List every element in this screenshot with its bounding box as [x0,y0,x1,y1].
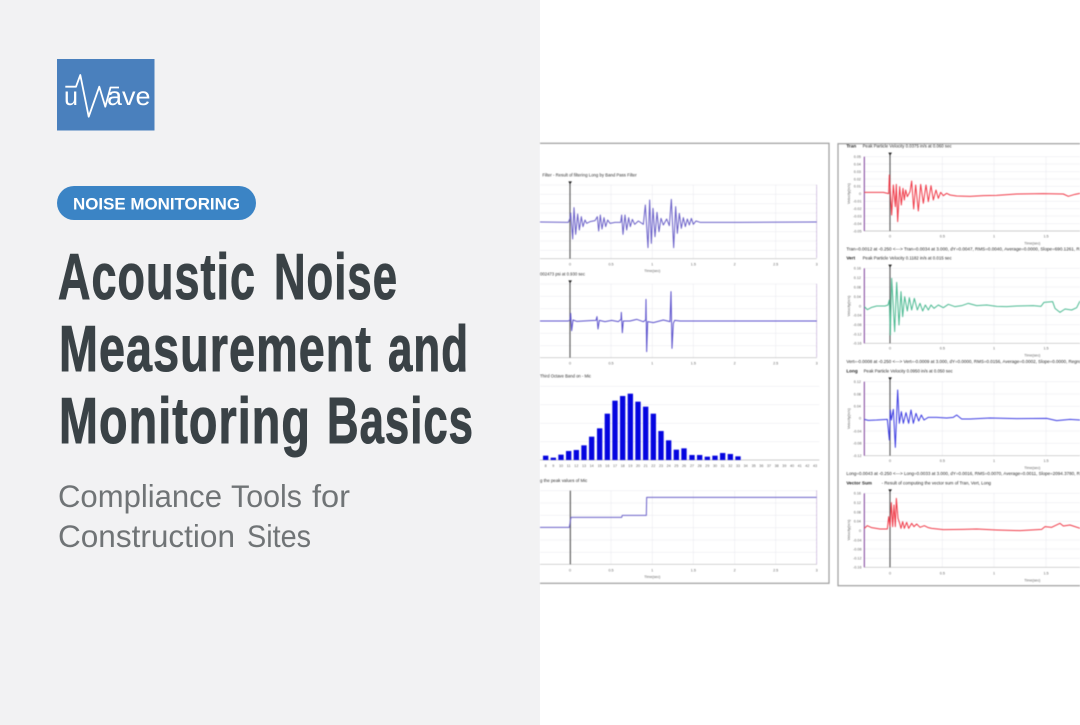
subtitle: for [312,478,350,514]
chart: Tran velocity: Time(sec) [1024,242,1040,246]
chart: Long velocity: Peak Particle Velocity 0.0950 in/s at 0.050 sec [864,368,953,373]
chart: Tran velocity: -0.05 [853,229,862,233]
chart: Tran velocity: -0.01 [853,200,862,204]
chart: Long velocity: 0.12 [854,380,861,384]
chart: microphone pressure waveform: 002473 psi at 0.930 sec [540,271,586,276]
chart: vector sum: -0.08 [853,547,862,551]
chart: Vert velocity [846,256,1080,364]
chart: vector sum: 1 [993,572,995,576]
panel: microphone charts frame [535,143,829,583]
band labels: 11 [567,464,571,468]
band labels: 43 [813,464,817,468]
chart: Vert velocity: -0.12 [853,332,862,336]
band labels: 17 [613,464,617,468]
title: and [388,312,469,385]
chart: Vert velocity: 1 [993,347,995,351]
chart: Long velocity: 1 [993,459,995,463]
chart: vector sum: Velocity(in/s) [847,520,851,540]
title: Acoustic [58,240,256,313]
subtitle: Tools [231,478,302,514]
chart: vector sum: 1.5 [1043,572,1049,576]
chart: Long velocity: -0.04 [853,429,862,433]
chart: band pass filter waveform: Filter - Result of filtering Long by Band Pass Filter [542,172,637,177]
chart: peak values step line: g the peak values of Mic [540,478,588,483]
chart: Long velocity: 1.5 [1043,459,1049,463]
chart: Long velocity: 0.5 [940,459,945,463]
band labels: 31 [721,464,725,468]
chart: Tran velocity: -0.03 [853,214,862,218]
band labels: 8 [545,464,547,468]
chart: peak values step line [540,478,818,579]
chart: Vert velocity: 0.08 [854,285,861,289]
chart: peak values step line: 3 [816,569,818,573]
chart: Vert velocity: 0.5 [940,347,945,351]
chart: Long velocity: 0.04 [854,405,861,409]
chart: vector sum: 0.04 [854,520,861,524]
title: Measurement [59,312,372,385]
band labels: 13 [582,464,586,468]
band labels: 33 [736,464,740,468]
chart: vector sum: -0.16 [853,566,862,570]
band labels: 26 [682,464,686,468]
chart: Vert velocity: -0.08 [853,323,862,327]
chart: Long velocity: -0.12 [853,454,862,458]
chart: Long velocity: 0.08 [854,392,861,396]
subtitle: Compliance [58,478,222,514]
band labels: 39 [782,464,786,468]
chart: Vert velocity: 1.5 [1043,347,1049,351]
band labels: 38 [775,464,779,468]
band labels: 27 [690,464,694,468]
logo: uWave [57,59,154,130]
chart: Tran velocity: Tran [846,143,856,148]
chart: Tran velocity: 1 [993,234,995,238]
chart: microphone pressure waveform: 1 [651,361,653,365]
chart: band pass filter waveform: 1.5 [691,262,696,266]
band labels: 9 [552,464,554,468]
chart: Long velocity: -0.08 [853,442,862,446]
band labels: 37 [767,464,771,468]
chart: peak values step line: Time(sec) [644,575,660,579]
band labels: 19 [628,464,632,468]
chart: Tran velocity: 0.01 [854,185,861,189]
band labels: 25 [674,464,678,468]
chart: vector sum: 0.08 [854,510,861,514]
left panel: title area [0,0,540,725]
chart: Tran velocity: 0.04 [854,162,861,166]
chart: Long velocity: Time(sec) [1024,466,1040,470]
chart: Vert velocity: Vert [846,256,856,261]
category pill: noise monitoring [57,186,256,220]
chart: Tran velocity: 0.05 [854,155,861,159]
chart: band pass filter waveform: 2 [734,262,736,266]
chart: vector sum: 0 [889,572,891,576]
chart: Vert velocity: 0.16 [854,267,861,271]
chart: microphone pressure waveform: 0.5 [608,361,614,365]
band labels: 24 [667,464,671,468]
chart: Tran velocity: -0.04 [853,222,862,226]
chart: microphone pressure waveform: 1.5 [691,361,696,365]
chart: peak values step line: 1.5 [691,569,696,573]
band labels: 12 [574,464,578,468]
chart: band pass filter waveform: 0 [569,262,571,266]
band labels: 21 [644,464,648,468]
chart: Tran velocity: Peak Particle Velocity 0.0375 in/s at 0.060 sec [863,143,952,148]
band labels: 15 [598,464,602,468]
chart: vector sum: 0.5 [940,572,945,576]
chart: Vert velocity: 0 [859,304,861,308]
band labels: 41 [798,464,802,468]
chart: Vert velocity: 0.12 [854,276,861,280]
band labels: 42 [805,464,809,468]
chart: microphone pressure waveform: 3 [816,361,818,365]
logo: uWave: ave [107,81,150,111]
chart: band pass filter waveform: 3 [816,262,818,266]
chart: band pass filter waveform: 0.5 [608,262,614,266]
chart: peak values step line: 2 [734,569,736,573]
chart: Long velocity: 0 [889,459,891,463]
band labels: 20 [636,464,640,468]
chart: band pass filter waveform: 2.5 [773,262,778,266]
chart: Tran velocity: Velocity(in/s) [847,183,851,204]
chart: vector sum: Time(sec) [1024,578,1040,582]
chart: Vert velocity: Peak Particle Velocity 0.1182 in/s at 0.015 sec [863,256,952,261]
band labels: 18 [621,464,625,468]
chart: Long velocity [846,368,1080,476]
chart: vector sum [846,480,1080,582]
title [58,240,474,457]
chart: third octave band bars: Third Octave Band on - Mic [540,373,592,378]
band labels: 28 [698,464,702,468]
chart: Long velocity: Long [846,368,858,373]
subtitle: Sites [247,518,311,554]
chart: Vert velocity: 0.04 [854,295,861,299]
logo: uWave: u [64,81,78,111]
band labels: 16 [605,464,609,468]
band labels: 30 [713,464,717,468]
bars [543,394,741,460]
subtitle: Construction [58,518,235,554]
chart: peak values step line: 2.5 [773,569,778,573]
chart: Tran velocity: 0.5 [940,234,945,238]
chart: microphone pressure waveform: 2.5 [773,361,778,365]
chart: vector sum: - Result of computing the vector sum of Tran, Vert, Long [882,480,991,485]
subtitle [58,478,350,554]
chart: peak values step line: 0 [569,569,571,573]
band labels: 32 [728,464,732,468]
band labels: 14 [590,464,594,468]
band labels: 23 [659,464,663,468]
title: Basics [327,384,474,457]
chart: vector sum: -0.04 [853,538,862,542]
chart: Tran velocity: 0 [859,192,861,196]
band labels: 22 [651,464,655,468]
chart: Tran velocity [846,143,1080,251]
band labels: 40 [790,464,794,468]
chart: microphone pressure waveform: 0 [569,361,571,365]
chart: vector sum: Vector Sum [846,480,872,485]
chart: Vert velocity: Time(sec) [1024,354,1040,358]
chart: vector sum: 0.12 [854,501,861,505]
chart: third octave band bars [540,373,819,468]
chart: peak values step line: 1 [651,569,653,573]
chart: Tran velocity: 1.5 [1043,234,1049,238]
chart: Vert velocity: 0 [889,347,891,351]
chart: Vert velocity: -0.16 [853,342,862,346]
chart: vector sum: 0 [859,529,861,533]
chart: Long velocity: 0 [859,417,861,421]
chart: Tran velocity: -0.02 [853,207,862,211]
title: Monitoring [59,384,311,457]
band labels: 35 [752,464,756,468]
chart: band pass filter waveform: 1 [651,262,653,266]
chart: vector sum: -0.12 [853,557,862,561]
band labels: 36 [759,464,763,468]
band labels: 10 [559,464,563,468]
band labels: 29 [705,464,709,468]
chart: microphone pressure waveform: 2 [734,361,736,365]
band labels [545,464,817,468]
chart: microphone pressure waveform [540,271,818,365]
category pill: noise monitoring: NOISE MONITORING [73,194,240,214]
chart: peak values step line: 0.5 [608,569,614,573]
chart: Tran velocity: 0.03 [854,170,861,174]
chart: Vert velocity: Velocity(in/s) [847,296,851,316]
title: Noise [274,240,398,313]
chart: band pass filter waveform [540,172,818,273]
chart screenshots area [540,142,1080,587]
chart: Tran velocity: 0 [889,234,891,238]
panel: geophone charts frame [838,144,1080,586]
chart: Vert velocity: -0.04 [853,314,862,318]
chart: Tran velocity: 0.02 [854,177,861,181]
chart: band pass filter waveform: Time(sec) [644,269,660,273]
chart: Long velocity: Velocity(in/s) [847,408,851,429]
chart: vector sum: 0.16 [854,492,861,496]
band labels: 34 [744,464,748,468]
